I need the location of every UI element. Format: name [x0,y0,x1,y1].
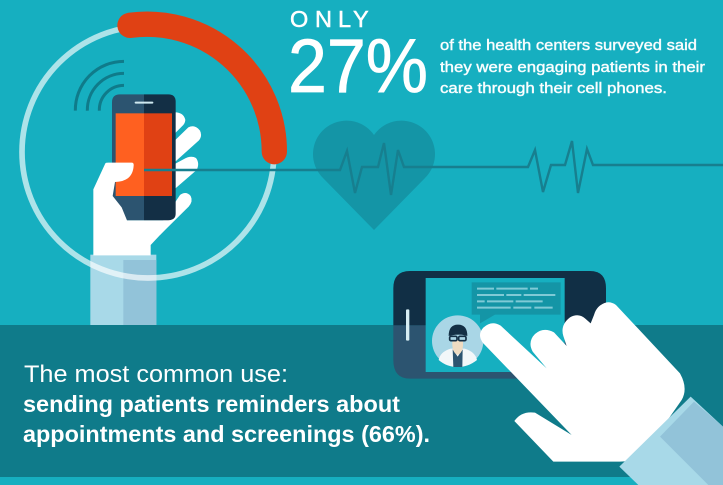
statistic description: they were engaging patients in their [440,59,705,76]
band caption [23,361,430,447]
sleeve cuff [619,397,723,485]
dark teal band [0,325,723,477]
speech bubble [472,282,561,323]
phone body [112,94,176,220]
palm and thumb [93,163,185,255]
icon: hand holding phone [22,24,274,325]
icon: heart [313,121,435,230]
big number: 27%: 27% [288,24,428,109]
icon: hand tapping phone with doctor video call [393,271,723,485]
heading: only: ONLY [290,6,369,32]
band caption: The most common use: [24,361,288,388]
icon: signal waves [75,61,124,111]
statistic description: care through their cell phones. [440,80,667,97]
phone body [393,271,606,379]
statistic description [440,37,705,97]
progress ring [22,26,274,278]
pointing hand [480,302,685,462]
band caption: appointments and screenings (66%). [23,421,430,447]
progress arc, 27 percent [130,24,274,152]
sleeve cuff [90,255,156,325]
statistic description: of the health centers surveyed said [440,37,697,54]
doctor avatar [432,315,483,367]
band caption: sending patients reminders about [23,391,400,417]
fingers [160,112,201,235]
heartbeat line [144,141,723,195]
